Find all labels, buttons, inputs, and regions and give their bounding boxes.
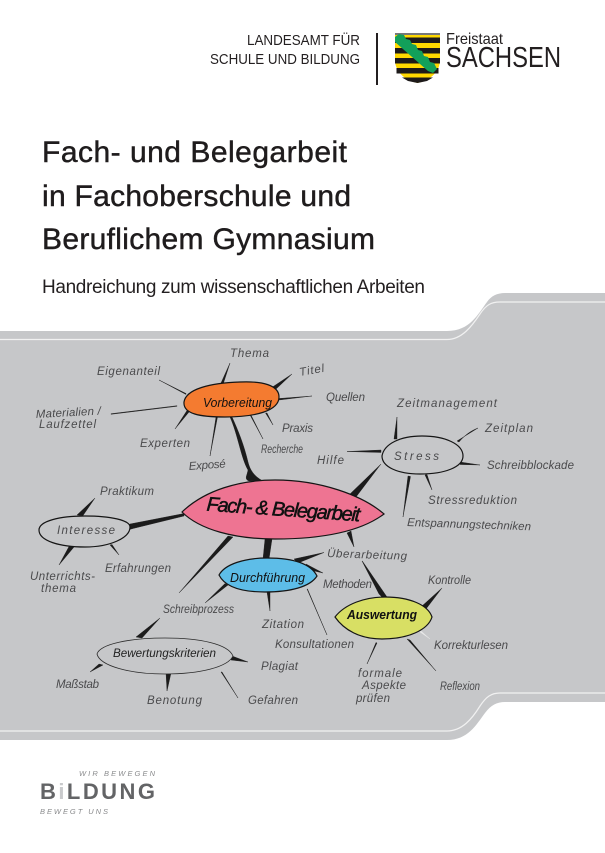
mind map labels: Eigenanteil — [97, 366, 160, 378]
panel: grey mind map background — [0, 293, 605, 740]
mind map labels — [30, 348, 574, 707]
header: issuing office — [210, 31, 360, 68]
node: Fach- und Belegarbeit centre — [182, 480, 384, 539]
mind map labels: Materialien / — [36, 406, 103, 421]
node: Bewertungskriterien — [97, 638, 233, 674]
mind map labels: Schreibprozess — [163, 604, 234, 616]
header: issuing office: SCHULE UND BILDUNG — [210, 51, 360, 68]
mind map labels: Maßstab — [56, 679, 100, 691]
mind map labels: Laufzettel — [39, 419, 96, 431]
title: in Fachoberschule und — [42, 180, 351, 213]
mind map labels: Zeitmanagement — [396, 398, 498, 410]
mind map labels: Aspekte — [361, 680, 406, 692]
mind map labels: Konsultationen — [275, 639, 354, 651]
mind map labels: Benotung — [147, 695, 203, 707]
node: Bewertungskriterien: Bewertungskriterien — [113, 648, 216, 660]
mind map labels: Methoden — [323, 579, 372, 591]
mind map labels: Plagiat — [261, 661, 299, 673]
header: issuing office: LANDESAMT FÜR — [247, 31, 360, 49]
title: Beruflichem Gymnasium — [42, 223, 375, 256]
mind map connector lines — [59, 363, 480, 698]
node: Stress: Stress — [394, 451, 439, 463]
mind map labels: Quellen — [326, 392, 365, 404]
mind map labels: Stressreduktion — [428, 495, 517, 507]
mind map labels: Korrekturlesen — [434, 640, 508, 652]
mind map labels: Überarbeitung — [327, 548, 408, 563]
title: Fach- und Belegarbeit — [42, 136, 348, 169]
logo: Wir bewegen Bildung bewegt uns — [40, 769, 156, 816]
subtitle: Handreichung zum wissenschaftlichen Arbeiten — [42, 277, 425, 298]
mind map labels: prüfen — [355, 693, 390, 705]
mind map labels: Zitation — [261, 619, 304, 631]
mind map labels: Thema — [230, 348, 269, 360]
mind map labels: Schreibblockade — [487, 460, 574, 472]
node: Durchführung — [219, 558, 317, 592]
header: Freistaat Sachsen wordmark: SACHSEN — [446, 42, 561, 74]
icon: Saxony coat of arms — [395, 33, 440, 83]
node: Auswertung: Auswertung — [346, 607, 417, 622]
mind map labels: Hilfe — [317, 455, 344, 467]
node: Vorbereitung — [184, 382, 279, 417]
mind map labels: Recherche — [261, 444, 303, 456]
mind map labels: Kontrolle — [428, 575, 471, 587]
mind map labels: Exposé — [188, 458, 226, 473]
mind map labels: Praktikum — [100, 486, 154, 498]
node: Durchführung: Durchführung — [230, 570, 306, 585]
node: Vorbereitung: Vorbereitung — [203, 395, 273, 410]
header: Freistaat Sachsen wordmark — [446, 31, 561, 74]
mind map labels: formale — [358, 668, 402, 680]
logo: Wir bewegen Bildung bewegt uns: WIR BEWEGEN — [79, 769, 156, 778]
node: Interesse: Interesse — [57, 525, 115, 537]
logo: Wir bewegen Bildung bewegt uns: BEWEGT UNS — [40, 807, 108, 816]
title — [42, 136, 375, 256]
node: Auswertung — [335, 597, 432, 639]
mind map labels: Titel — [298, 363, 326, 379]
mind map labels: Praxis — [282, 423, 313, 435]
mind map labels: Gefahren — [248, 695, 298, 707]
mind map labels: Entspannungstechniken — [407, 517, 531, 533]
mind map labels: thema — [41, 583, 76, 595]
mind map labels: Experten — [140, 438, 190, 450]
logo: Wir bewegen Bildung bewegt uns: BiLDUNG — [40, 779, 156, 804]
mind map labels: Unterrichts- — [30, 571, 95, 583]
node: Interesse — [39, 516, 130, 547]
node: Fach- und Belegarbeit centre: Fach- & Belegarbeit — [206, 494, 362, 526]
mind map labels: Zeitplan — [484, 423, 533, 435]
node: Stress — [382, 436, 463, 474]
header: Freistaat Sachsen wordmark: Freistaat — [446, 31, 504, 48]
mind map labels: Reflexion — [440, 681, 480, 693]
mind map labels: Erfahrungen — [105, 563, 171, 575]
header divider — [376, 33, 378, 85]
